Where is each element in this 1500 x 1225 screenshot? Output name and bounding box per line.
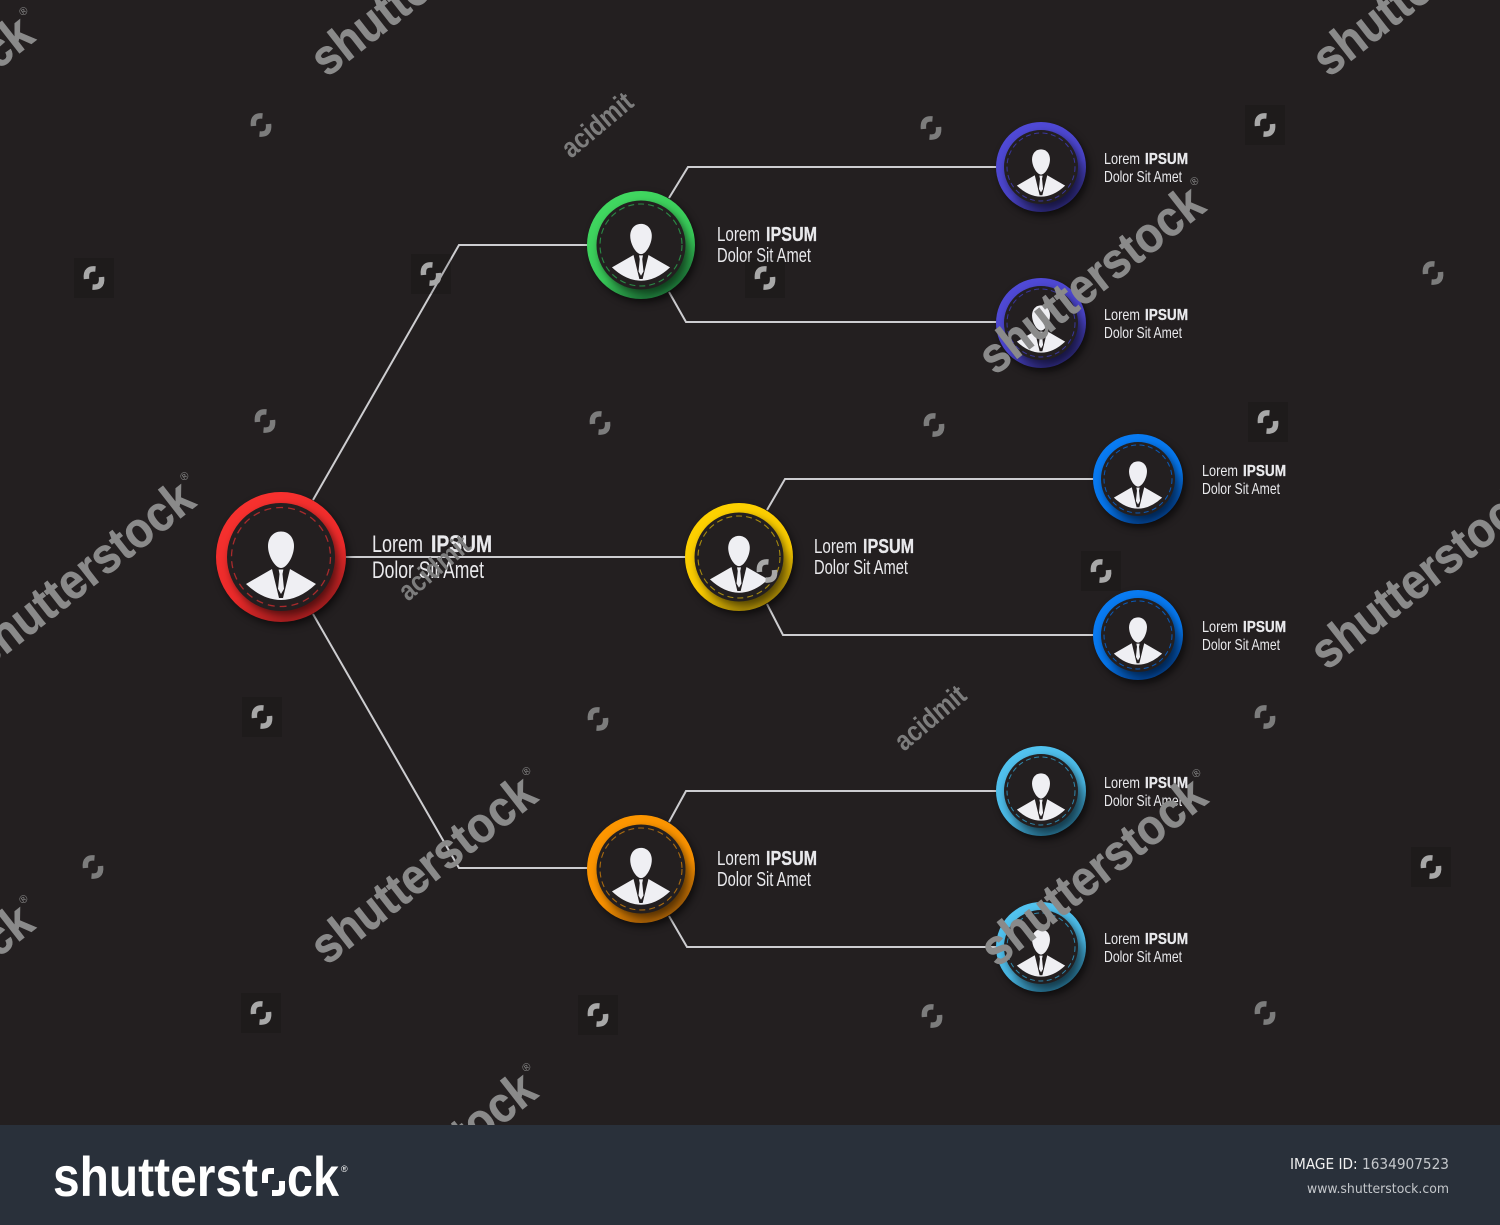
label: blue bottom <box>1202 619 1286 654</box>
label: light blue top: IPSUM <box>1145 775 1188 792</box>
label: orange: Dolor Sit Amet <box>717 869 811 891</box>
label: blue top <box>1202 463 1286 498</box>
watermark: shutterstock wordmarks: ® <box>17 5 31 19</box>
label: light blue top <box>1104 775 1188 810</box>
node: light blue top <box>996 746 1086 836</box>
watermark: acidmit: acidmit <box>888 679 972 757</box>
label: root <box>372 531 492 584</box>
label: indigo top: Dolor Sit Amet <box>1104 169 1182 186</box>
node: light blue bottom <box>996 902 1086 992</box>
watermark: shutterstock wordmarks: ® <box>178 470 192 484</box>
node: blue top <box>1093 434 1183 524</box>
node: indigo top <box>996 122 1086 212</box>
footer bar <box>0 1125 1500 1225</box>
node: yellow <box>685 503 793 611</box>
label: light blue bottom: Dolor Sit Amet <box>1104 949 1182 966</box>
label: yellow: IPSUM <box>863 536 914 558</box>
label: blue bottom: Lorem <box>1202 619 1238 636</box>
label: indigo top: Lorem <box>1104 151 1140 168</box>
label: green: IPSUM <box>766 224 817 246</box>
label: indigo bottom: IPSUM <box>1145 307 1188 324</box>
label: green: Dolor Sit Amet <box>717 245 811 267</box>
label: orange: IPSUM <box>766 848 817 870</box>
node: orange <box>587 815 695 923</box>
connector lines <box>313 167 1098 947</box>
label: green: Lorem <box>717 224 760 246</box>
label: indigo bottom <box>1104 307 1188 342</box>
label: green <box>717 224 817 267</box>
label: light blue top: Dolor Sit Amet <box>1104 793 1182 810</box>
watermark: shutterstock wordmarks: shutterstock <box>969 766 1217 977</box>
label: light blue bottom: Lorem <box>1104 931 1140 948</box>
label: root: Lorem <box>372 531 423 558</box>
label: blue top: Lorem <box>1202 463 1238 480</box>
label: light blue bottom: IPSUM <box>1145 931 1188 948</box>
node: indigo bottom <box>996 278 1086 368</box>
label: orange: Lorem <box>717 848 760 870</box>
footer image id: IMAGE ID: 1634907523 <box>1290 1155 1449 1173</box>
label: orange <box>717 848 817 891</box>
label: yellow <box>814 536 914 579</box>
label: blue top: Dolor Sit Amet <box>1202 481 1280 498</box>
watermark: acidmit <box>392 86 972 757</box>
footer logo: shutterst <box>53 1145 258 1208</box>
node: root red <box>216 492 346 622</box>
label: yellow: Lorem <box>814 536 857 558</box>
label: indigo top <box>1104 151 1188 186</box>
watermark: shutterstock wordmarks: ® <box>1190 767 1204 781</box>
watermark: shutterstock wordmarks: ® <box>1188 175 1202 189</box>
node: green <box>587 191 695 299</box>
label: yellow: Dolor Sit Amet <box>814 557 908 579</box>
footer logo: ® <box>341 1164 348 1174</box>
label: blue bottom: Dolor Sit Amet <box>1202 637 1280 654</box>
watermark: shutterstock wordmarks: ® <box>17 893 31 907</box>
watermark: shutterstock wordmarks: shutterstock <box>967 174 1215 385</box>
label: indigo top: IPSUM <box>1145 151 1188 168</box>
watermark: acidmit: acidmit <box>555 86 639 164</box>
label: light blue bottom <box>1104 931 1188 966</box>
label: light blue top: Lorem <box>1104 775 1140 792</box>
label: blue top: IPSUM <box>1243 463 1286 480</box>
label: root: IPSUM <box>431 531 492 558</box>
watermark: shutterstock wordmarks: ® <box>520 1061 534 1075</box>
label: indigo bottom: Lorem <box>1104 307 1140 324</box>
label: root: Dolor Sit Amet <box>372 557 484 584</box>
watermark: acidmit: acidmit <box>392 529 476 607</box>
watermark: shutterstock wordmarks: shutterstock <box>299 764 547 975</box>
label: indigo bottom: Dolor Sit Amet <box>1104 325 1182 342</box>
watermark: shutterstock wordmarks: ® <box>520 765 534 779</box>
footer logo: ck <box>287 1145 340 1208</box>
node: blue bottom <box>1093 590 1183 680</box>
label: blue bottom: IPSUM <box>1243 619 1286 636</box>
watermark: small square marks <box>74 105 1451 1035</box>
footer url: www.shutterstock.com <box>1307 1181 1449 1197</box>
